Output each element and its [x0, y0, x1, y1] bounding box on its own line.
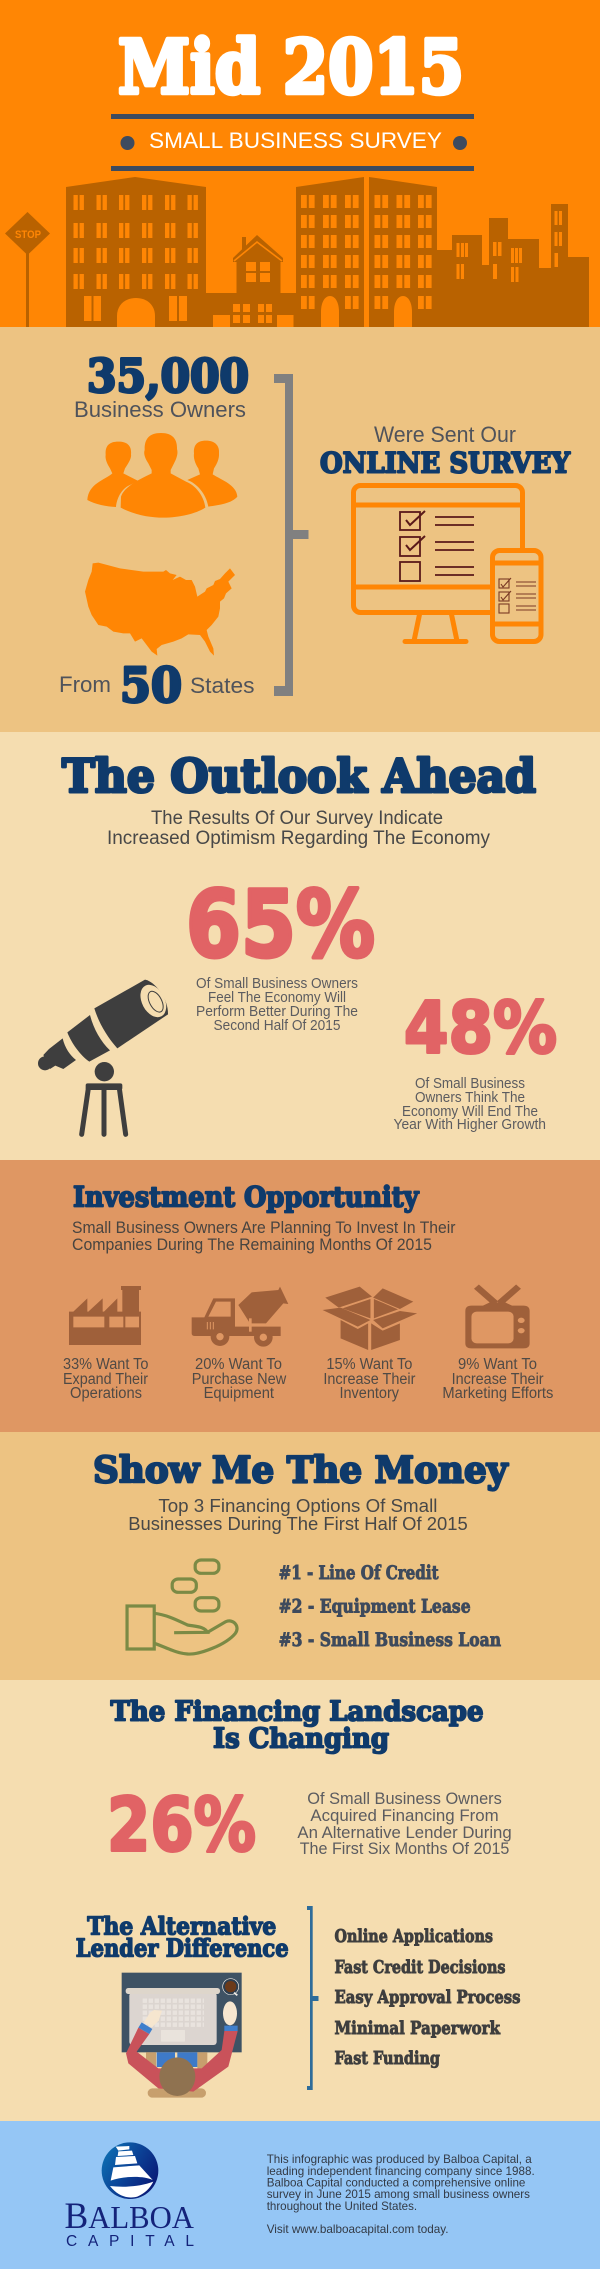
subheading: [107, 808, 490, 849]
caption: 65%: Feel The Economy Will: [208, 990, 346, 1006]
subheading: Top 3 Financing Options Of Small: [158, 1495, 437, 1516]
label: from 50 states: 50: [120, 658, 182, 714]
icon: three people: [87, 433, 237, 518]
heading: [110, 1696, 484, 1754]
icon: stop sign: [5, 212, 50, 327]
text: about: leading independent financing company since 1988.: [267, 2164, 535, 2178]
stat: 26%: 26%: [107, 1782, 256, 1868]
stat: 48%: 48%: [404, 986, 557, 1070]
logo: Balboa Capital: BALBOA: [64, 2196, 194, 2237]
list: financing options: #3 - Small Business Loan: [279, 1629, 501, 1651]
subtitle band: SMALL BUSINESS SURVEY: [149, 128, 442, 153]
caption: 26%: Of Small Business Owners: [307, 1789, 502, 1808]
caption: 65%: Second Half Of 2015: [214, 1018, 340, 1034]
caption: purchase equipment: [192, 1356, 287, 1402]
icon: city skyline: [437, 204, 589, 327]
text: about: Balboa Capital conducted a comprehensive online: [267, 2176, 526, 2190]
caption: 48%: Economy Will End The: [402, 1104, 538, 1120]
title: Mid 2015: [118, 25, 464, 111]
heading: Show Me The Money: [93, 1450, 509, 1492]
icon: open box: [323, 1287, 417, 1350]
logo: Balboa Capital: CAPITAL: [66, 2233, 194, 2250]
subtitle band: [111, 114, 474, 171]
icon: factory: [69, 1286, 141, 1345]
text: about: This infographic was produced by Balboa Capital, a: [267, 2152, 532, 2166]
icon: monitor with survey checklist: [353, 486, 523, 642]
caption: 48%: Of Small Business: [415, 1076, 525, 1092]
stat: 35,000: 35,000: [87, 349, 249, 403]
heading: alternative lender difference: Lender Difference: [76, 1934, 289, 1962]
list: lender benefits: Online Applications: [334, 1926, 493, 1947]
list: lender benefits: Fast Credit Decisions: [334, 1957, 506, 1978]
list: lender benefits: Minimal Paperwork: [334, 2018, 500, 2039]
text: about: [267, 2152, 535, 2236]
caption: increase inventory: 15% Want To: [326, 1356, 412, 1373]
caption: purchase equipment: Equipment: [204, 1385, 275, 1402]
subheading: [128, 1495, 468, 1534]
heading: Investment Opportunity: [73, 1180, 419, 1214]
panel: survey reach: [0, 327, 600, 732]
caption: 26%: [297, 1789, 512, 1858]
stat: 65%: 65%: [186, 871, 375, 978]
label: from 50 states: [59, 658, 254, 714]
heading: Is Changing: [213, 1722, 389, 1754]
caption: 48%: Year With Higher Growth: [394, 1117, 546, 1133]
caption: expand operations: Operations: [70, 1385, 142, 1402]
caption: expand operations: [63, 1356, 148, 1402]
caption: 48%: Owners Think The: [415, 1090, 525, 1106]
text: about: Visit www.balboacapital.com today.: [267, 2222, 448, 2236]
text: were sent our: Were Sent Our: [374, 422, 516, 447]
icon: twin tower building: [296, 177, 437, 327]
caption: 26%: Acquired Financing From: [310, 1806, 499, 1825]
caption: increase inventory: Increase Their: [323, 1371, 415, 1388]
caption: 26%: The First Six Months Of 2015: [300, 1839, 509, 1858]
subheading: [72, 1219, 456, 1254]
list: lender benefits: [334, 1926, 520, 2069]
logo: Balboa Capital: [64, 2142, 194, 2250]
list: financing options: [279, 1562, 501, 1651]
icon: stop sign: STOP: [15, 229, 41, 241]
icon: hand with coins: [127, 1560, 237, 1654]
bracket: [274, 374, 308, 696]
heading: online survey: ONLINE SURVEY: [320, 446, 571, 480]
caption: expand operations: Expand Their: [63, 1371, 148, 1388]
caption: purchase equipment: 20% Want To: [195, 1356, 282, 1373]
caption: increase marketing: [442, 1356, 554, 1402]
heading: alternative lender difference: [76, 1912, 289, 1962]
subheading: Companies During The Remaining Months Of 2015: [72, 1236, 432, 1254]
caption: increase inventory: [323, 1356, 415, 1402]
panel: show me the money: [0, 1432, 600, 1680]
bracket: benefits: [307, 1906, 318, 2090]
list: financing options: #2 - Equipment Lease: [279, 1596, 471, 1618]
heading: alternative lender difference: The Alternative: [87, 1912, 276, 1940]
text: about: survey in June 2015 among small business owners: [267, 2187, 530, 2201]
icon: left apartment building: [66, 177, 206, 327]
caption: increase marketing: 9% Want To: [458, 1356, 537, 1373]
icon: person at laptop from above: [122, 1973, 242, 2098]
icon: cement mixer truck: [192, 1287, 288, 1347]
panel: header: [0, 0, 600, 327]
label: from 50 states: States: [190, 673, 254, 698]
icon: phone with survey checklist: [492, 550, 541, 642]
caption: expand operations: 33% Want To: [63, 1356, 148, 1373]
subheading: Increased Optimism Regarding The Economy: [107, 828, 490, 849]
subheading: Small Business Owners Are Planning To Invest In Their: [72, 1219, 456, 1237]
caption: purchase equipment: Purchase New: [192, 1371, 287, 1388]
panel: the outlook ahead: [0, 732, 600, 1160]
label: business owners: Business Owners: [74, 397, 246, 422]
panel: footer: [0, 2121, 600, 2269]
list: lender benefits: Fast Funding: [334, 2048, 440, 2069]
icon: telescope: [38, 980, 171, 1134]
panel: the financing landscape: [0, 1680, 600, 2121]
caption: 65%: Perform Better During The: [196, 1004, 358, 1020]
heading: The Outlook Ahead: [62, 749, 536, 803]
text: about: throughout the United States.: [267, 2199, 417, 2213]
caption: increase marketing: Increase Their: [452, 1371, 544, 1388]
caption: 48%: [394, 1076, 546, 1133]
caption: increase marketing: Marketing Efforts: [442, 1385, 554, 1402]
caption: increase inventory: Inventory: [340, 1385, 399, 1402]
caption: 65%: [196, 976, 358, 1034]
list: financing options: #1 - Line Of Credit: [279, 1562, 439, 1584]
list: lender benefits: Easy Approval Process: [334, 1987, 520, 2008]
heading: The Financing Landscape: [110, 1696, 484, 1728]
subheading: Businesses During The First Half Of 2015: [128, 1513, 468, 1534]
caption: 26%: An Alternative Lender During: [297, 1823, 512, 1842]
subheading: The Results Of Our Survey Indicate: [151, 808, 443, 829]
panel: investment opportunity: [0, 1160, 600, 1432]
icon: television: [465, 1287, 530, 1348]
caption: 65%: Of Small Business Owners: [196, 976, 358, 992]
icon: map of the United States: [85, 563, 235, 656]
label: from 50 states: From: [59, 672, 111, 697]
icon: house: [206, 235, 296, 327]
